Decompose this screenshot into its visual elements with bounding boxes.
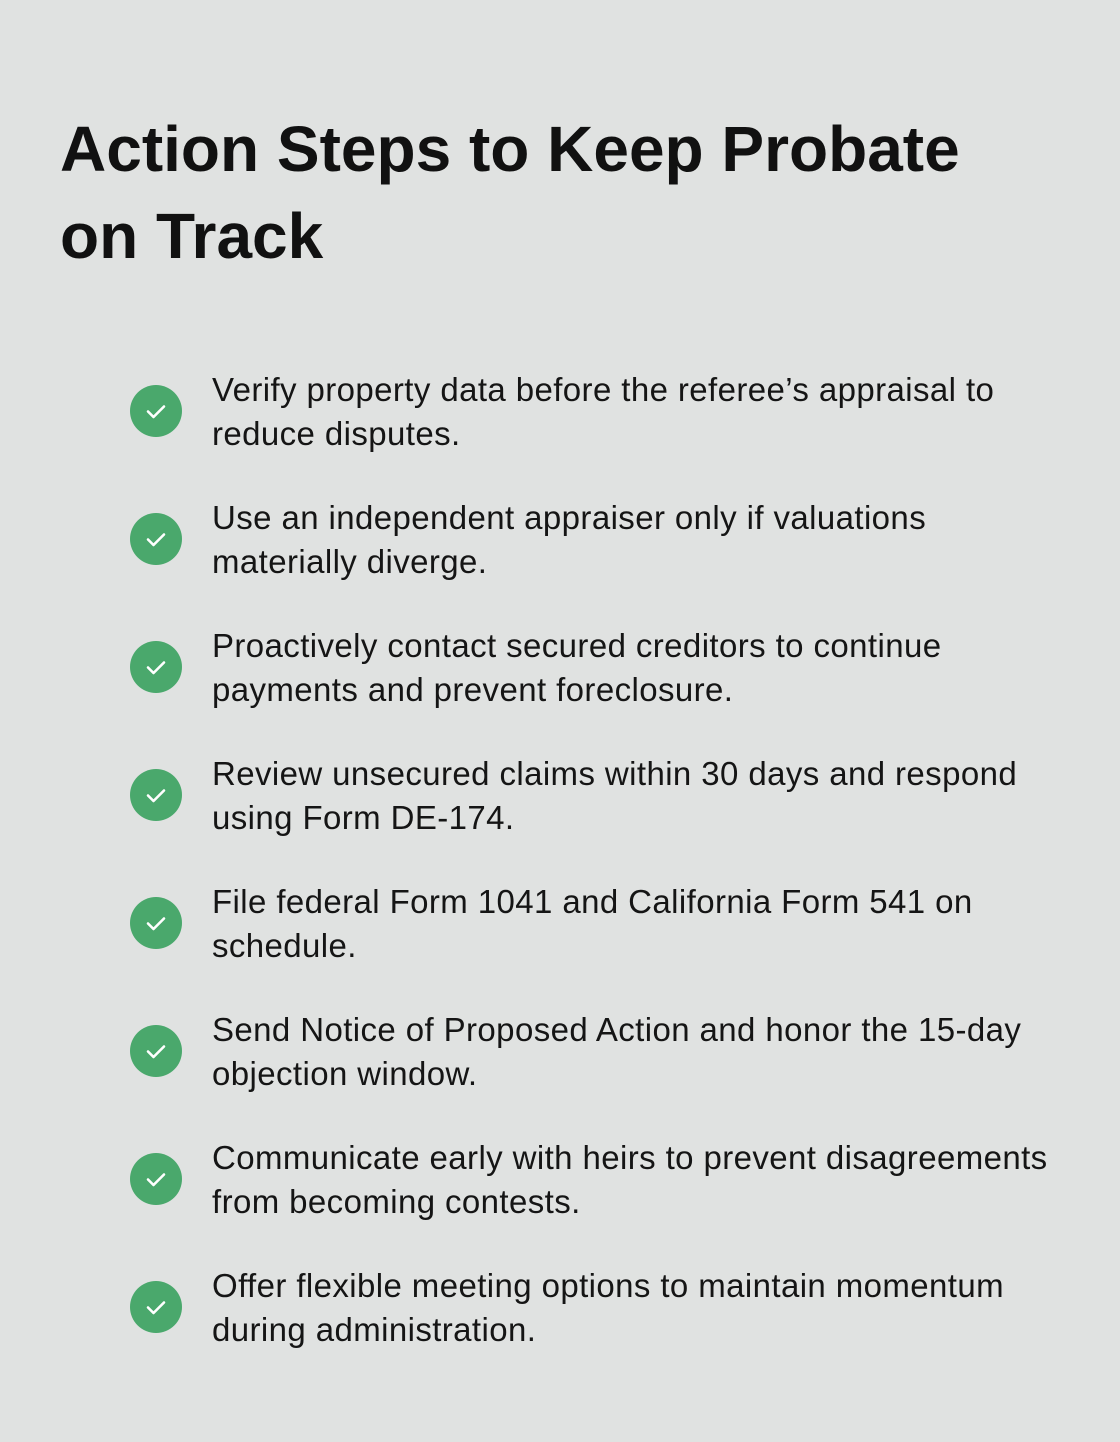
text [212, 1139, 1048, 1220]
item 8 [130, 1267, 1004, 1348]
text: Verify property data before the referee’s appraisal to [212, 371, 994, 408]
item 2 [130, 499, 926, 580]
text: payments and prevent foreclosure. [212, 671, 733, 708]
item 4 [130, 755, 1017, 836]
icon: check [130, 1153, 182, 1205]
item 3 [130, 627, 941, 708]
text: during administration. [212, 1311, 536, 1348]
text: materially diverge. [212, 543, 487, 580]
text: Proactively contact secured creditors to continue [212, 627, 941, 664]
icon: check [130, 513, 182, 565]
icon: check [130, 897, 182, 949]
title [60, 113, 960, 272]
text: Use an independent appraiser only if valuations [212, 499, 926, 536]
item 1 [130, 371, 994, 452]
icon: check [130, 641, 182, 693]
text: reduce disputes. [212, 415, 461, 452]
text: File federal Form 1041 and California Form 541 on [212, 883, 973, 920]
text [212, 883, 973, 964]
text [212, 1267, 1004, 1348]
title: Action Steps to Keep Probate [60, 113, 960, 185]
title: on Track [60, 200, 323, 272]
icon: check [130, 1025, 182, 1077]
text: Communicate early with heirs to prevent disagreements [212, 1139, 1048, 1176]
text [212, 1011, 1021, 1092]
text [212, 627, 941, 708]
icon: check [130, 1281, 182, 1333]
item 7 [130, 1139, 1048, 1220]
text: Review unsecured claims within 30 days and respond [212, 755, 1017, 792]
text: Offer flexible meeting options to maintain momentum [212, 1267, 1004, 1304]
text: schedule. [212, 927, 357, 964]
item 6 [130, 1011, 1021, 1092]
text [212, 371, 994, 452]
text: from becoming contests. [212, 1183, 581, 1220]
text: using Form DE-174. [212, 799, 514, 836]
item 5 [130, 883, 973, 964]
text [212, 755, 1017, 836]
text: Send Notice of Proposed Action and honor the 15-day [212, 1011, 1021, 1048]
text [212, 499, 926, 580]
icon: check [130, 385, 182, 437]
icon: check [130, 769, 182, 821]
text: objection window. [212, 1055, 477, 1092]
